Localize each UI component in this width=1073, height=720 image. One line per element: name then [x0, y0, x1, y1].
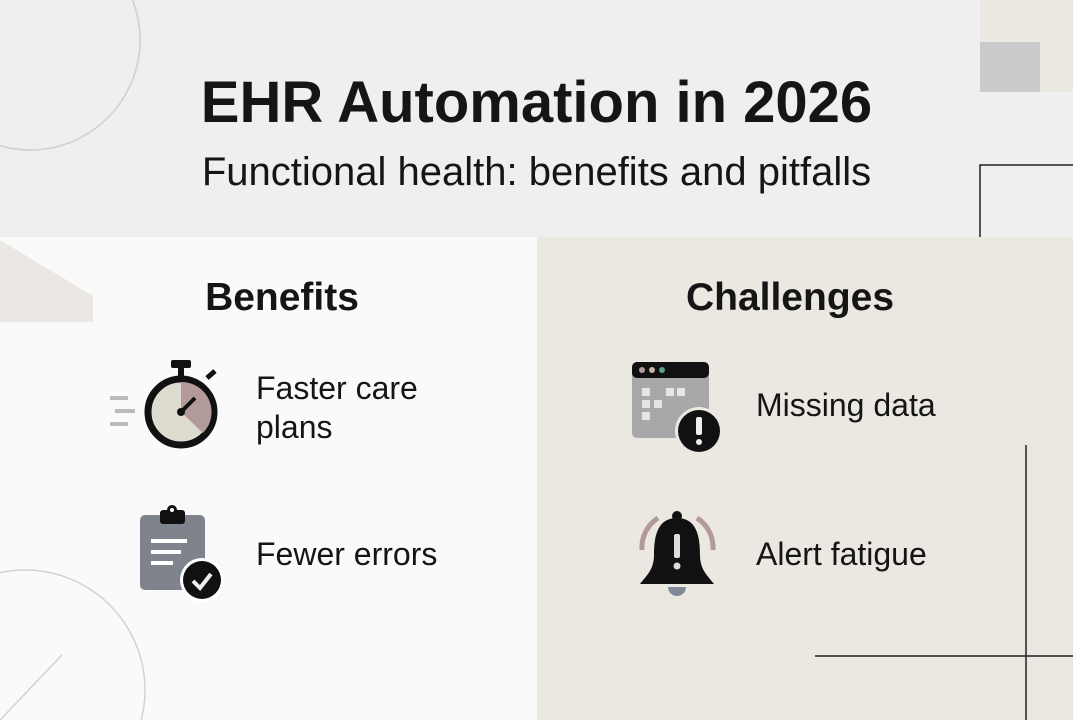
title: EHR Automation in 2026	[201, 70, 872, 135]
subtitle: Functional health: benefits and pitfalls	[202, 150, 871, 194]
text: faster care plans: plans	[256, 409, 332, 445]
text: alert fatigue: Alert fatigue	[756, 536, 927, 572]
text: missing data: Missing data	[756, 387, 936, 423]
icon: bell	[640, 511, 716, 596]
icon: stopwatch	[110, 360, 218, 448]
text: faster care plans: Faster care	[256, 370, 418, 406]
heading: challenges: Challenges	[686, 276, 894, 319]
icon: calendar warning	[632, 362, 720, 452]
icon: clipboard	[140, 505, 221, 599]
text: faster care plans	[256, 370, 418, 445]
text: fewer errors: Fewer errors	[256, 536, 437, 572]
heading: benefits: Benefits	[205, 276, 359, 319]
